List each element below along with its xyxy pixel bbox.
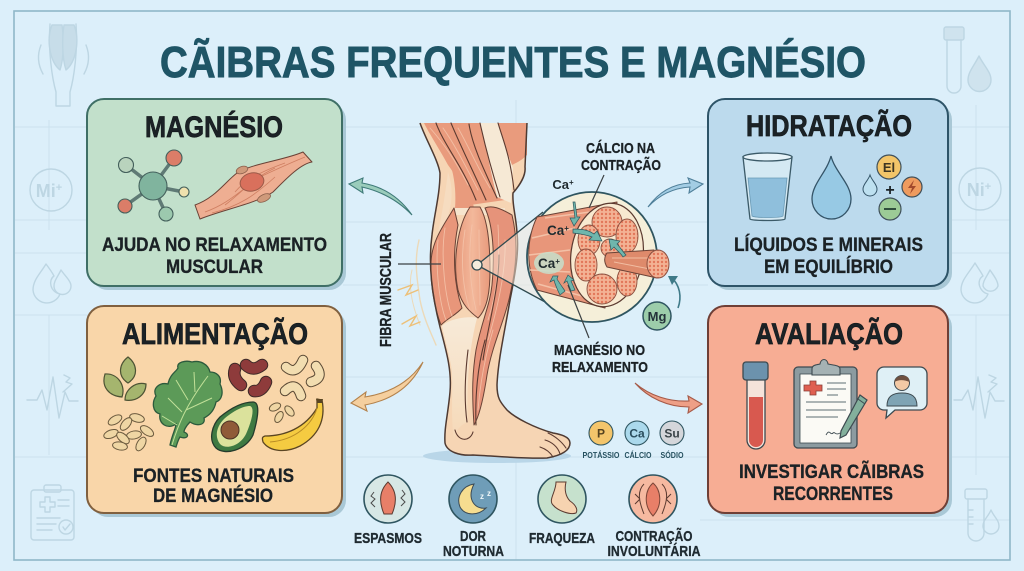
leg: upper muscles bbox=[424, 123, 527, 232]
leg: lateral calf muscle bbox=[431, 208, 462, 325]
panel text: hidratação: LÍQUIDOS E MINERAIS bbox=[734, 234, 923, 256]
symptom: espasmos bbox=[354, 475, 422, 547]
heading: magnésio: MAGNÉSIO bbox=[145, 110, 283, 144]
title: CÃIBRAS FREQUENTES E MAGNÉSIO bbox=[160, 37, 866, 87]
symptom: fraqueza bbox=[529, 475, 595, 547]
mineral: potássio: POTÁSSIO bbox=[582, 450, 620, 460]
label: Ca+ ions: Ca bbox=[547, 223, 564, 238]
mineral: potássio: P bbox=[597, 426, 605, 440]
leg: foot toes bbox=[540, 433, 566, 457]
icon: molecule bbox=[118, 150, 189, 221]
background icon: water drops left bbox=[33, 264, 71, 303]
icon: avocado bbox=[212, 402, 258, 452]
mineral: cálcio bbox=[624, 421, 652, 460]
label: Ca+ ions: + bbox=[564, 224, 569, 233]
icon: oats bbox=[103, 412, 155, 452]
panel text: alimentação: FONTES NATURAIS bbox=[133, 466, 294, 487]
leg: outline bbox=[420, 123, 570, 458]
label: Ca+ ions: Ca bbox=[538, 256, 555, 271]
symptom: contração involuntária: CONTRAÇÃO bbox=[616, 527, 693, 545]
panel text: alimentação bbox=[133, 466, 294, 507]
minerals: potássio, cálcio, sódio bbox=[582, 421, 684, 460]
symptom: dor noturna: NOTURNA bbox=[443, 543, 504, 560]
fascicles bbox=[575, 207, 638, 304]
leg: gastrocnemius bbox=[456, 207, 490, 318]
label: fibra muscular: FIBRA MUSCULAR bbox=[378, 233, 395, 347]
icon: kale leaf bbox=[153, 361, 222, 447]
label: Ca+ ions bbox=[538, 177, 574, 271]
heading: avaliação: AVALIAÇÃO bbox=[755, 317, 903, 351]
symptom: contração involuntária: INVOLUNTÁRIA bbox=[608, 543, 701, 560]
label: Ca+ ions: Ca bbox=[552, 177, 569, 192]
icon: Mg ion bbox=[643, 276, 680, 330]
panel: avaliação bbox=[708, 306, 952, 517]
panel text: hidratação: EM EQUILÍBRIO bbox=[764, 256, 893, 278]
leg: outer muscles bbox=[473, 207, 516, 425]
panel text: avaliação bbox=[739, 461, 924, 505]
symptom: dor noturna: z bbox=[480, 492, 484, 501]
mineral: cálcio: Ca bbox=[629, 426, 645, 440]
icon: banana bbox=[262, 399, 323, 451]
mineral: potássio bbox=[582, 421, 620, 460]
symptom: dor noturna: DOR bbox=[460, 528, 486, 545]
symptom: dor noturna: z bbox=[487, 489, 491, 498]
label: Ca+ ions: + bbox=[569, 178, 574, 187]
mineral: sódio bbox=[660, 421, 684, 460]
icon: blood tube bbox=[743, 362, 768, 449]
background icon: test tube and drop top right bbox=[944, 27, 991, 93]
mineral: sódio: SÓDIO bbox=[660, 449, 684, 460]
panel text: avaliação: RECORRENTES bbox=[773, 484, 893, 505]
background icon: pulse right bbox=[954, 375, 1004, 418]
background icon: Mi+ ion: Mi bbox=[36, 181, 56, 201]
background icon: calf muscles bbox=[39, 24, 88, 106]
background icon: Mi+ ion bbox=[30, 169, 72, 211]
mineral: sódio: Su bbox=[664, 426, 680, 440]
background icon: pulse left bbox=[27, 375, 78, 418]
background icon: Ni+ ion bbox=[959, 168, 1001, 210]
heading: alimentação: ALIMENTAÇÃO bbox=[122, 317, 308, 351]
label: magnésio no relaxamento: MAGNÉSIO NO bbox=[554, 342, 645, 359]
icon: glass of water bbox=[743, 153, 792, 220]
flow arrows bbox=[550, 202, 626, 295]
extruded fibre bbox=[605, 250, 669, 278]
icon: electrolytes bbox=[877, 155, 922, 220]
arrow: to alimentação bbox=[351, 362, 423, 411]
icon: small seeds bbox=[268, 401, 296, 424]
calcium glow bbox=[534, 252, 564, 274]
icon: pen bbox=[840, 395, 867, 438]
panel: alimentação bbox=[87, 306, 346, 517]
icon: water drop bbox=[812, 156, 851, 219]
symptom: fraqueza: FRAQUEZA bbox=[529, 530, 595, 547]
arrow: to hidratação bbox=[648, 178, 703, 207]
symptom: contração involuntária bbox=[608, 475, 701, 560]
panel: magnésio bbox=[87, 99, 346, 290]
inset: muscle fibre cross-section bbox=[527, 192, 669, 322]
background icon: clipboard left bbox=[31, 485, 74, 540]
icon: muscle bbox=[195, 152, 312, 219]
icon: cashews bbox=[285, 360, 320, 396]
icon: clipboard bbox=[794, 360, 857, 448]
background icon: Mi+ ion: + bbox=[56, 182, 62, 194]
leg: achilles tendon bbox=[442, 317, 477, 440]
background icon: Ni+ ion: + bbox=[985, 181, 991, 193]
zoom pointer wedge bbox=[472, 212, 547, 303]
icon: kidney beans bbox=[234, 365, 266, 391]
illustration: leg anatomy bbox=[420, 123, 571, 463]
icon: electrolytes: El bbox=[883, 160, 895, 175]
background icon: Ni+ ion: Ni bbox=[967, 180, 985, 200]
bundle body bbox=[529, 202, 617, 308]
heading: hidratação: HIDRATAÇÃO bbox=[746, 109, 912, 143]
panel text: magnésio: AJUDA NO RELAXAMENTO bbox=[102, 235, 327, 256]
panel text: magnésio bbox=[102, 235, 327, 278]
icon: small drop bbox=[863, 175, 877, 196]
label: cálcio na contração bbox=[581, 140, 661, 208]
icon: Mg ion: Mg bbox=[648, 309, 666, 324]
panel: hidratação bbox=[708, 99, 952, 290]
mineral: cálcio: CÁLCIO bbox=[624, 450, 652, 460]
symptom: dor noturna bbox=[443, 475, 504, 560]
spasm marks beside leg bbox=[398, 240, 436, 345]
label: cálcio na contração: CONTRAÇÃO bbox=[581, 156, 661, 174]
label: Ca+ ions: + bbox=[555, 257, 560, 266]
symptom: espasmos: ESPASMOS bbox=[354, 530, 422, 547]
panel text: hidratação bbox=[734, 234, 923, 278]
arrow: to magnésio bbox=[349, 178, 412, 215]
label: magnésio no relaxamento: RELAXAMENTO bbox=[552, 359, 648, 376]
icon: pumpkin seeds bbox=[104, 357, 146, 400]
label: fibra muscular bbox=[378, 233, 441, 347]
label: magnésio no relaxamento bbox=[552, 285, 648, 376]
panel text: magnésio: MUSCULAR bbox=[166, 257, 263, 278]
icon: doctor speech bubble bbox=[877, 367, 927, 418]
icon: electrolytes: + bbox=[885, 182, 895, 199]
background icon: test tube and drop bottom right bbox=[965, 489, 999, 541]
label: cálcio na contração: CÁLCIO NA bbox=[586, 140, 655, 157]
background icon: water drops right bbox=[961, 263, 998, 303]
arrow: to avaliação bbox=[635, 383, 702, 413]
panel text: alimentação: DE MAGNÉSIO bbox=[153, 485, 273, 507]
panel text: avaliação: INVESTIGAR CÃIBRAS bbox=[739, 461, 924, 483]
bundle end face bbox=[564, 198, 650, 312]
